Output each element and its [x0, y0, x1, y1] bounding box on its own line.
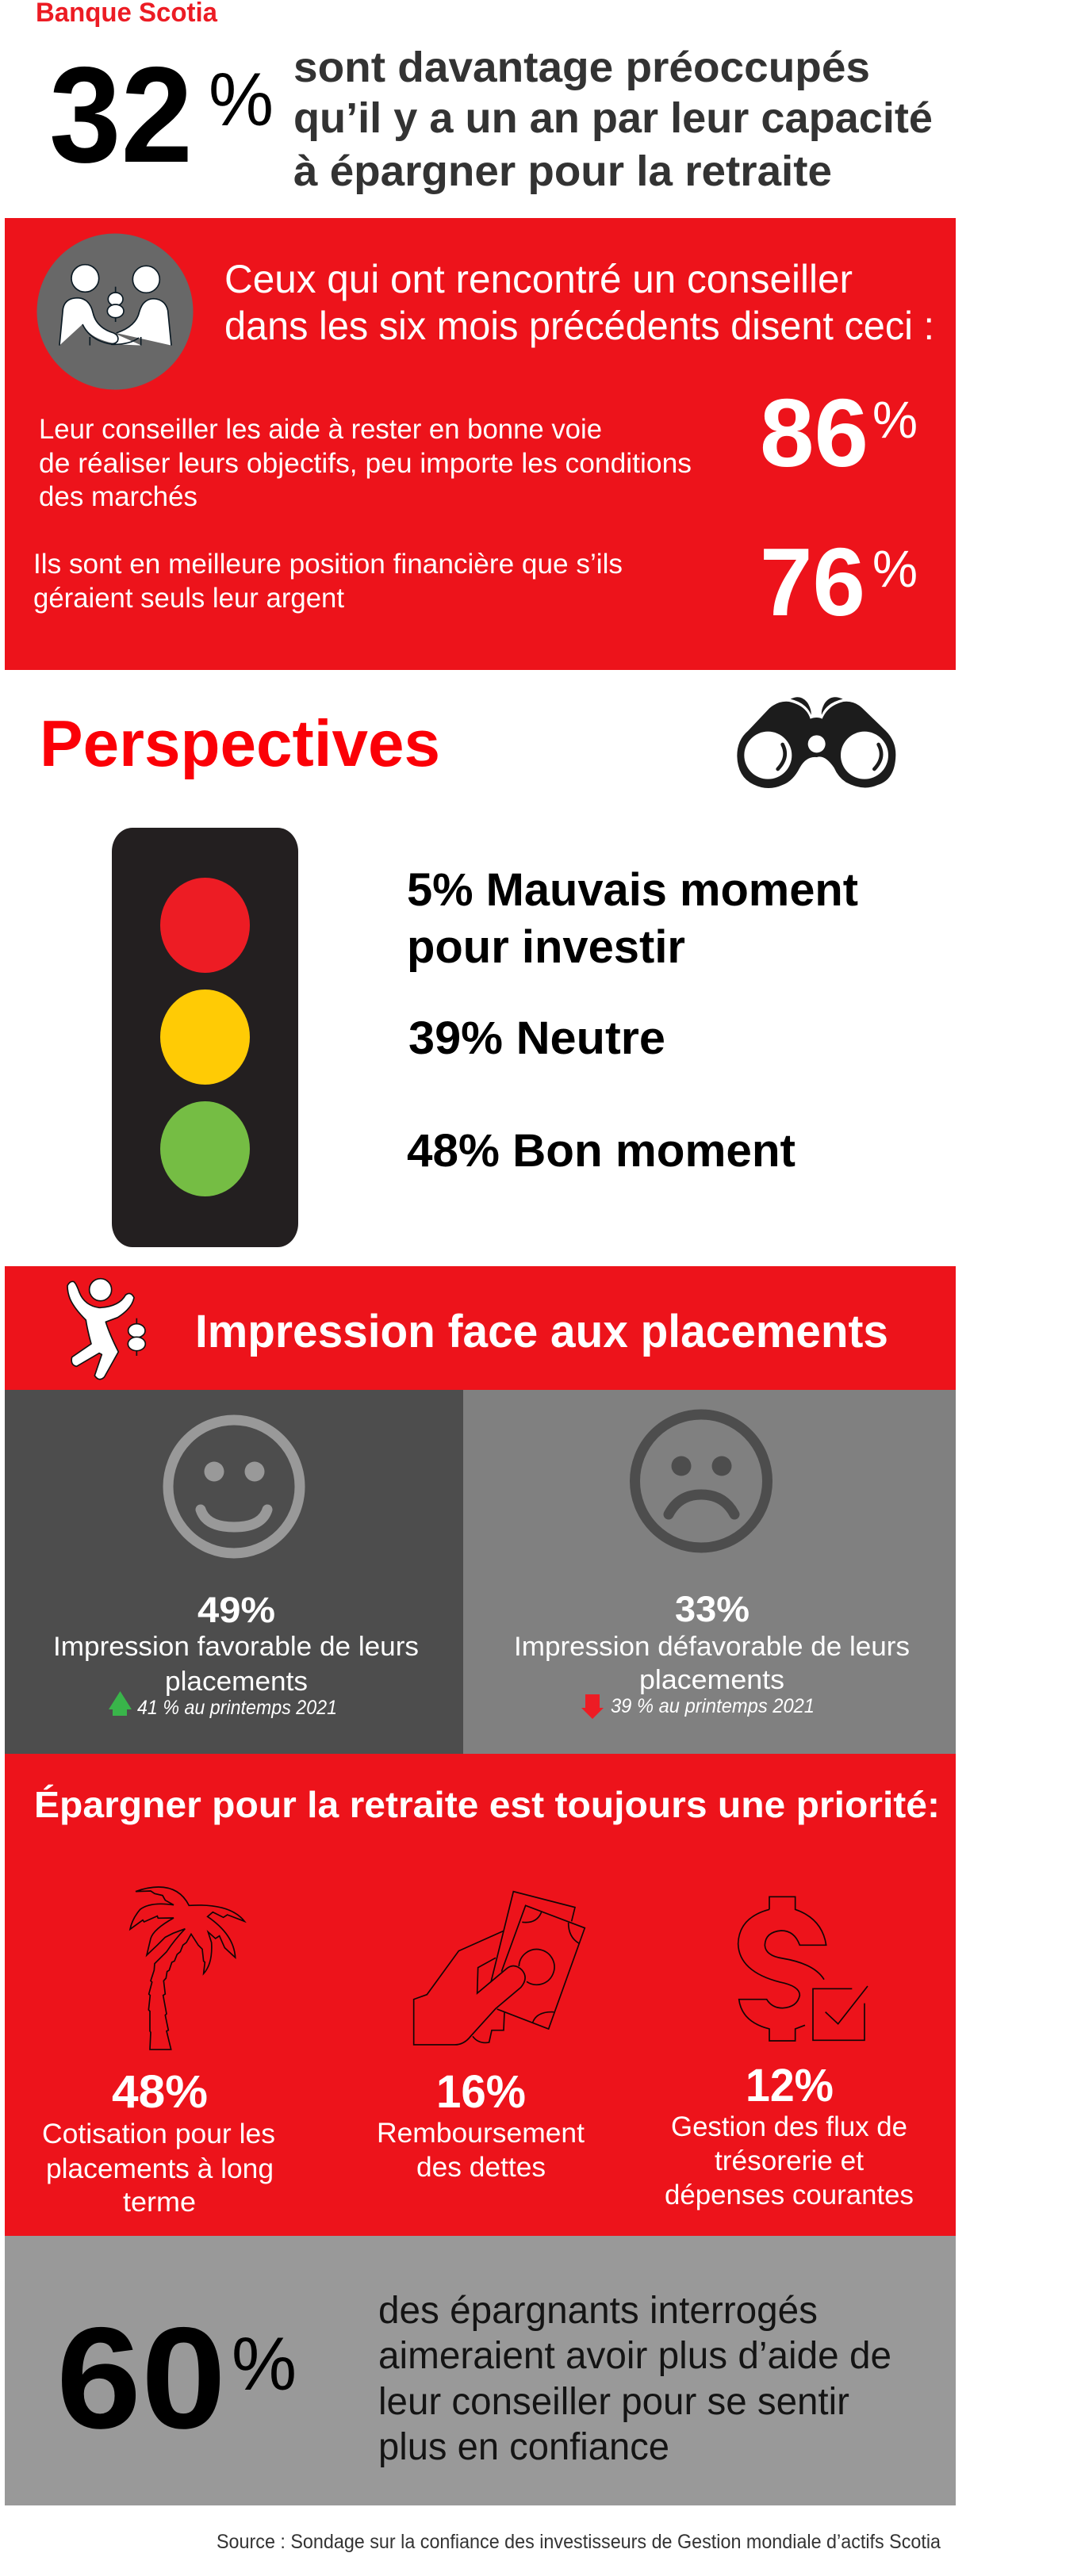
arrow down: red: [581, 1694, 604, 1719]
statistic: 86%: 86: [760, 379, 868, 487]
icon: dollar sign and check box: [738, 1897, 868, 2041]
icon: palm tree: [130, 1887, 244, 2050]
headline text: qu’il y a un an par leur capacité: [293, 94, 933, 142]
statement: better financial position: Ils sont en meilleure position financière que s’ils: [33, 549, 623, 580]
statement: stay on track: des marchés: [39, 481, 197, 512]
red light: [160, 878, 250, 973]
description: placements: [165, 1667, 308, 1697]
arrow up: green: [109, 1691, 132, 1716]
statement: better financial position: [33, 549, 623, 614]
description: leur conseiller pour se sentir: [378, 2381, 849, 2423]
description: Impression défavorable de leurs: [514, 1632, 910, 1662]
description: plus en confiance: [378, 2426, 669, 2468]
statistic: 48% long-term investments: terme: [123, 2187, 196, 2218]
traffic light: [112, 828, 298, 1247]
statistic: 16% debt repayment: Remboursement: [377, 2118, 585, 2149]
yellow light: [160, 989, 250, 1085]
percent sign: %: [209, 58, 274, 142]
description: aimeraient avoir plus d’aide de: [378, 2335, 891, 2377]
statement: better financial position: géraient seuls leur argent: [33, 583, 344, 614]
statistic: 12% cash flow and expenses: 12%: [746, 2060, 834, 2111]
description: placements: [639, 1665, 784, 1695]
statistic: 60%: %: [232, 2322, 297, 2406]
panel heading: dans les six mois précédents disent ceci :: [224, 304, 934, 348]
statistic: 76%: 76: [760, 528, 865, 636]
statistic: 12% cash flow and expenses: trésorerie et: [715, 2145, 864, 2176]
statistic: 60%: [56, 2297, 297, 2459]
statistic: 49%: 49%: [197, 1590, 275, 1630]
panel heading: [224, 257, 934, 348]
statistic: 16% debt repayment: 16%: [436, 2066, 526, 2118]
outlook label: 5% bad time: [407, 864, 858, 973]
outlook label: 5% bad time: 5% Mauvais moment: [407, 864, 858, 916]
band heading: Impression face aux placements: [195, 1306, 888, 1357]
statistic: 48% long-term investments: placements à long: [46, 2153, 274, 2184]
icon: jumping person with dollar sign: [67, 1279, 145, 1380]
panel: unfavourable impression: [463, 1390, 956, 1754]
panel: favourable impression: [5, 1390, 463, 1754]
statistic: 16% debt repayment: [377, 2066, 585, 2183]
statistic: 86%: %: [872, 390, 918, 449]
statistic: 12% cash flow and expenses: Gestion des flux de: [671, 2111, 907, 2142]
outlook label: 48% good time: 48% Bon moment: [407, 1125, 796, 1177]
headline text: [293, 44, 933, 195]
icon: hand holding money: [414, 1892, 585, 2045]
statement: stay on track: de réaliser leurs objectifs, peu importe les conditions: [39, 448, 692, 479]
icon: smiling face: [168, 1420, 300, 1553]
statistic: 48% long-term investments: 48%: [112, 2066, 208, 2118]
outlook label: 5% bad time: pour investir: [407, 921, 685, 973]
statistic: 12% cash flow and expenses: dépenses courantes: [665, 2180, 914, 2210]
comparison note: 39 % au printemps 2021: [611, 1695, 815, 1717]
description: [514, 1632, 910, 1695]
number 32: 32: [49, 39, 193, 191]
statistic: 86%: [760, 379, 918, 487]
statistic: 33%: 33%: [675, 1589, 750, 1629]
panel: impression heading band: [5, 1266, 956, 1390]
headline text: sont davantage préoccupés: [293, 44, 870, 91]
outlook label: 39% neutral: 39% Neutre: [408, 1012, 665, 1064]
description: [53, 1632, 419, 1697]
icon: sad face: [635, 1414, 768, 1548]
panel heading: Ceux qui ont rencontré un conseiller: [224, 257, 853, 301]
description: des épargnants interrogés: [378, 2290, 818, 2332]
heading: Perspectives: Perspectives: [40, 706, 440, 780]
statistic: 76%: %: [872, 539, 918, 598]
statement: stay on track: Leur conseiller les aide à rester en bonne voie: [39, 414, 602, 445]
statement: stay on track: [39, 414, 692, 512]
statistic: 48% long-term investments: [42, 2066, 275, 2218]
panel heading: Épargner pour la retraite est toujours une priorité:: [34, 1784, 940, 1825]
statistic: 16% debt repayment: des dettes: [416, 2152, 546, 2183]
panel: 60% want more advisor help: [5, 2236, 956, 2505]
source note: Source : Sondage sur la confiance des investisseurs de Gestion mondiale d’actifs Scotia: [217, 2531, 941, 2553]
panel: advisor meeting results: [5, 218, 956, 670]
statistic: 12% cash flow and expenses: [665, 2060, 914, 2210]
description: [378, 2290, 891, 2468]
icon: two people shaking hands with dollar sign: [36, 233, 194, 390]
headline statistic: 32%: [49, 39, 274, 191]
icon: binoculars: [737, 697, 895, 788]
green light: [160, 1101, 250, 1196]
statistic: 48% long-term investments: Cotisation pour les: [42, 2119, 275, 2149]
headline text: à épargner pour la retraite: [293, 147, 832, 195]
description: Impression favorable de leurs: [53, 1632, 419, 1662]
panel: saving priorities: [5, 1754, 956, 2236]
comparison note: 41 % au printemps 2021: [137, 1697, 337, 1719]
statistic: 60%: 60: [56, 2297, 226, 2459]
statistic: 76%: [760, 528, 918, 636]
